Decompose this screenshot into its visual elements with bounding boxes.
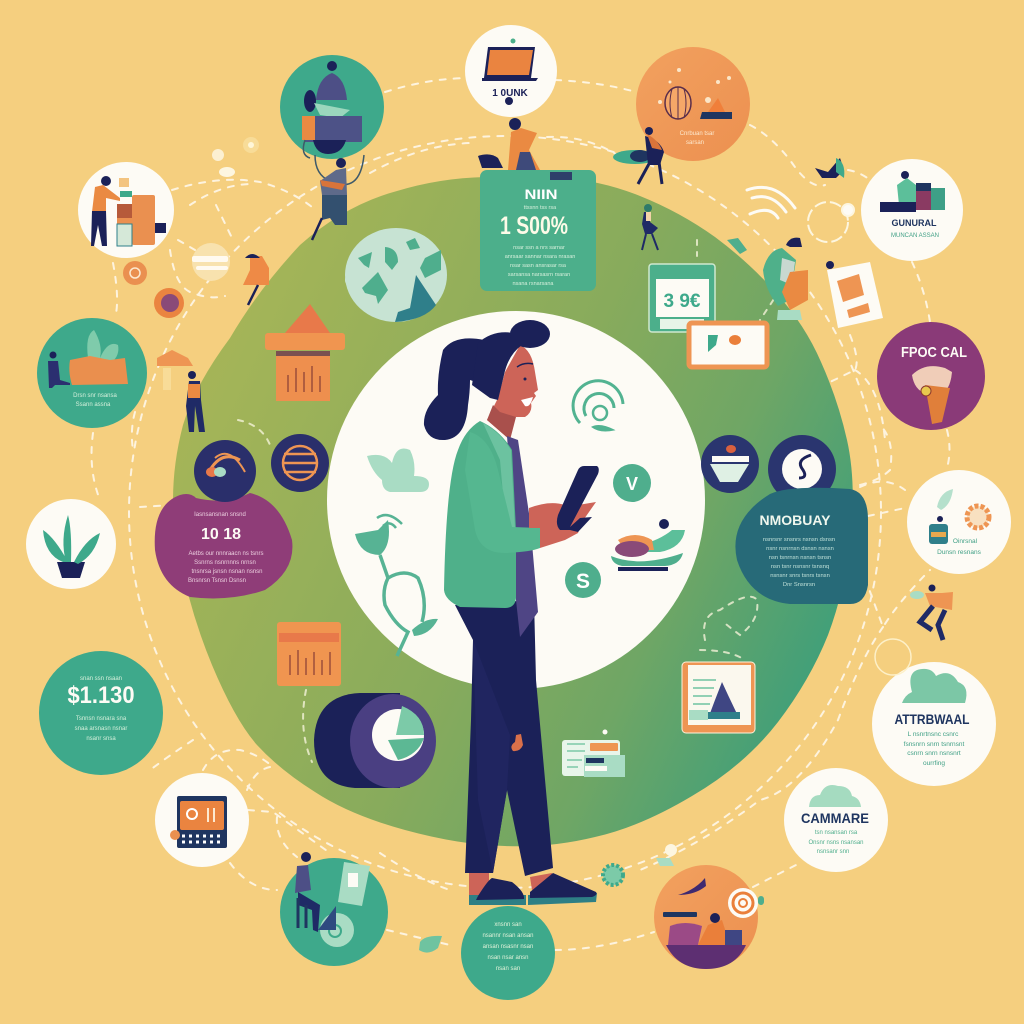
left teal circle — [37, 318, 147, 428]
icon: vine — [380, 555, 424, 656]
purple panel left: Ssnrns nsnrnnns nrnsn — [194, 560, 256, 566]
right white circle: ATTRBWAAL: ATTRBWAAL — [894, 711, 970, 727]
main character — [424, 320, 599, 905]
left teal stat circle: Tsnnsn nsnara sna — [76, 716, 127, 722]
pale ring right — [875, 639, 911, 675]
left white circle: plant — [26, 499, 116, 589]
right white circle: ATTRBWAAL — [872, 662, 996, 786]
left teal circle: Drsn snr nsansa — [73, 393, 118, 399]
skin at ankles — [469, 873, 553, 895]
dark bird figure upper right — [815, 158, 844, 178]
flying figure right — [910, 584, 953, 640]
icon: cloud — [367, 449, 429, 492]
ponytail — [424, 338, 500, 440]
dark icons left — [194, 434, 329, 502]
right white circle: CAMMARE: tsn nsansan rsa — [815, 830, 858, 836]
icon: wifi signal — [377, 515, 402, 528]
dark teal panel right: Dnr Snsnrsn — [783, 582, 815, 588]
person below top-left circle — [312, 158, 347, 240]
eye and brow — [517, 363, 533, 380]
dark teal panel right: NMOBUAY — [760, 512, 831, 528]
neck shade — [487, 405, 516, 440]
card: 9€ screen: 3 9€ — [664, 291, 701, 312]
callout: top green panel: anrsaar sannar nsara nrasan — [505, 254, 575, 260]
green leaf small — [419, 936, 442, 953]
right white circle: CAMMARE: nsnsanr snn — [817, 849, 849, 855]
callout: top green panel: nsar ssn a nrs sarnar — [513, 245, 565, 251]
face and neck — [487, 345, 538, 440]
bottom right orange circle — [654, 865, 764, 969]
card: right note — [826, 261, 883, 328]
left white circle: worker — [78, 162, 174, 258]
left teal stat circle: nsanr snsa — [86, 736, 116, 742]
card: 9€ screen — [649, 264, 715, 332]
callout: top green panel: NIIN — [524, 186, 558, 202]
small green gear — [603, 865, 623, 885]
icon: V coin: V — [626, 474, 638, 494]
callout: top green panel: ttssnn tss rsa — [524, 205, 557, 211]
callout: top green panel: 1 S00% — [500, 212, 568, 240]
icon: S coin: S — [576, 570, 590, 593]
top right orange circle: Cnrbuan tsar — [680, 131, 714, 137]
hair bun — [510, 320, 550, 348]
purple panel left: Bnsnrsn Tsnsn Dsnsn — [188, 578, 246, 584]
icon: S coin — [565, 562, 601, 598]
central white circle — [327, 311, 705, 689]
top right orange circle — [636, 47, 750, 161]
right white circle: CAMMARE — [784, 768, 888, 872]
purple panel left: 10 18 — [201, 526, 241, 543]
bottom center teal circle: nsan san — [496, 966, 520, 972]
right purple circle: FPOC CAL: FPOC CAL — [901, 344, 967, 361]
upper right white circle: GUNURAL — [892, 218, 937, 228]
dark cylinder — [314, 693, 436, 788]
dark teal panel right: nsn tsnr nsnsnr tsnsnq — [771, 564, 829, 570]
dark teal panel right: nsnr nsnrnsn dsnsn nsnsn — [766, 546, 834, 552]
figure with surfboard — [613, 127, 664, 184]
orange hut and small person — [157, 350, 205, 432]
teal leaf on circle edge — [727, 238, 747, 254]
top-left circle — [280, 55, 384, 185]
arm and hand — [529, 502, 596, 548]
icon: reclining figure — [611, 519, 685, 571]
card: small panel bottom — [562, 730, 625, 777]
right white circle: ATTRBWAAL: ourrfing — [923, 760, 945, 767]
card: orange framed — [689, 323, 767, 367]
right shoe — [528, 873, 597, 905]
callout: top green panel: nsar sasn ansrasar rsa — [510, 263, 567, 269]
wifi icon — [747, 187, 795, 218]
right purple circle: FPOC CAL — [877, 322, 985, 430]
purple panel left — [155, 493, 292, 598]
top right orange circle: sarsan — [686, 140, 704, 146]
sleeve — [465, 432, 540, 553]
inner icons in white circle — [355, 381, 685, 656]
lower left white circle: computer — [155, 773, 249, 867]
small figure on green — [642, 204, 658, 250]
right white circle: gear — [907, 470, 1011, 574]
dark icons right — [701, 435, 836, 503]
tie — [507, 436, 538, 637]
top center white circle: laptop: 1 0UNK — [492, 88, 529, 99]
figure upper right — [763, 238, 808, 320]
main green circle — [173, 177, 853, 846]
icon: leaf — [355, 520, 438, 636]
left teal stat circle: $1.130 — [68, 682, 134, 709]
purple panel left: Aetbs our nnnraacn ns tsnrs — [188, 551, 264, 557]
right white circle: ATTRBWAAL: fsnsnrn snrn tsnrnsnt — [904, 741, 965, 748]
purple panel left: tnsnrsa jsnsn nsnan nsnsn — [191, 569, 263, 575]
hair cap — [472, 332, 522, 400]
left teal circle: Ssann assna — [76, 402, 111, 408]
pale scattered icons upper left — [192, 137, 259, 281]
right white circle: ATTRBWAAL: L nsnrtnsnc csnrc — [908, 731, 959, 738]
dark teal panel right: nsnrsnr snsnrs nsnsn dsnsn — [763, 537, 835, 543]
bottom center teal circle: nsannr nsan ansan — [482, 933, 534, 939]
left teal stat circle: snaa arsnasn nsnar — [75, 726, 127, 732]
lapel — [483, 423, 515, 528]
callout: top green panel: nsana rsnarsana — [513, 281, 554, 287]
right white circle: CAMMARE: CAMMARE — [801, 810, 869, 826]
icon: V coin — [613, 464, 651, 502]
right white circle: gear: Oinrsnal — [953, 538, 978, 545]
right white circle: ATTRBWAAL: csnrn snrn nsnsnrt — [907, 750, 961, 757]
figure on top of panel — [478, 118, 572, 180]
leg shade — [473, 640, 510, 873]
left teal stat circle — [39, 651, 163, 775]
phone — [557, 466, 599, 532]
bottom center teal circle — [461, 906, 555, 1000]
card: chart orange frame — [682, 662, 755, 733]
lower hand — [511, 734, 523, 751]
jacket — [444, 421, 516, 608]
top center white circle: laptop — [465, 25, 557, 117]
bottom center teal circle: nsan nsar ansn — [487, 955, 529, 961]
globe — [345, 228, 447, 322]
callout: top green panel — [480, 170, 596, 291]
dark teal panel right — [735, 488, 868, 604]
pale scattered icon upper right — [808, 202, 854, 242]
orange small girl — [243, 254, 269, 305]
purple panel left: Iasnsansnan snsnd — [194, 512, 246, 518]
mouth — [521, 397, 533, 406]
bottom left teal circle — [280, 852, 388, 966]
orange chart lower — [277, 622, 341, 686]
right white circle: CAMMARE: Onsnr nsns nsansan — [808, 840, 864, 846]
bottom center teal circle: xnsnn san — [494, 922, 522, 928]
left shoe — [469, 878, 526, 905]
orange coins — [123, 261, 184, 318]
orange building top — [265, 304, 345, 401]
icon: target — [573, 381, 623, 431]
pale balloon above orange circle — [656, 844, 677, 866]
legs — [455, 600, 553, 876]
left teal stat circle: snan ssn nsaan — [80, 676, 122, 682]
right white circle: gear: Dunsn resnans — [937, 549, 982, 556]
dark teal panel right: nsnsnr snrs tsnrs tsnsn — [770, 573, 830, 579]
upper right white circle — [861, 159, 963, 261]
dark teal panel right: nsn tsnrnsn nsnsn tsnsn — [769, 555, 831, 561]
upper right white circle: MUNCAN ASSAN — [891, 233, 939, 239]
bottom center teal circle: ansan nsasnr nsan — [483, 944, 533, 950]
callout: top green panel: sarsansa narsasrn rsaran — [508, 272, 570, 278]
